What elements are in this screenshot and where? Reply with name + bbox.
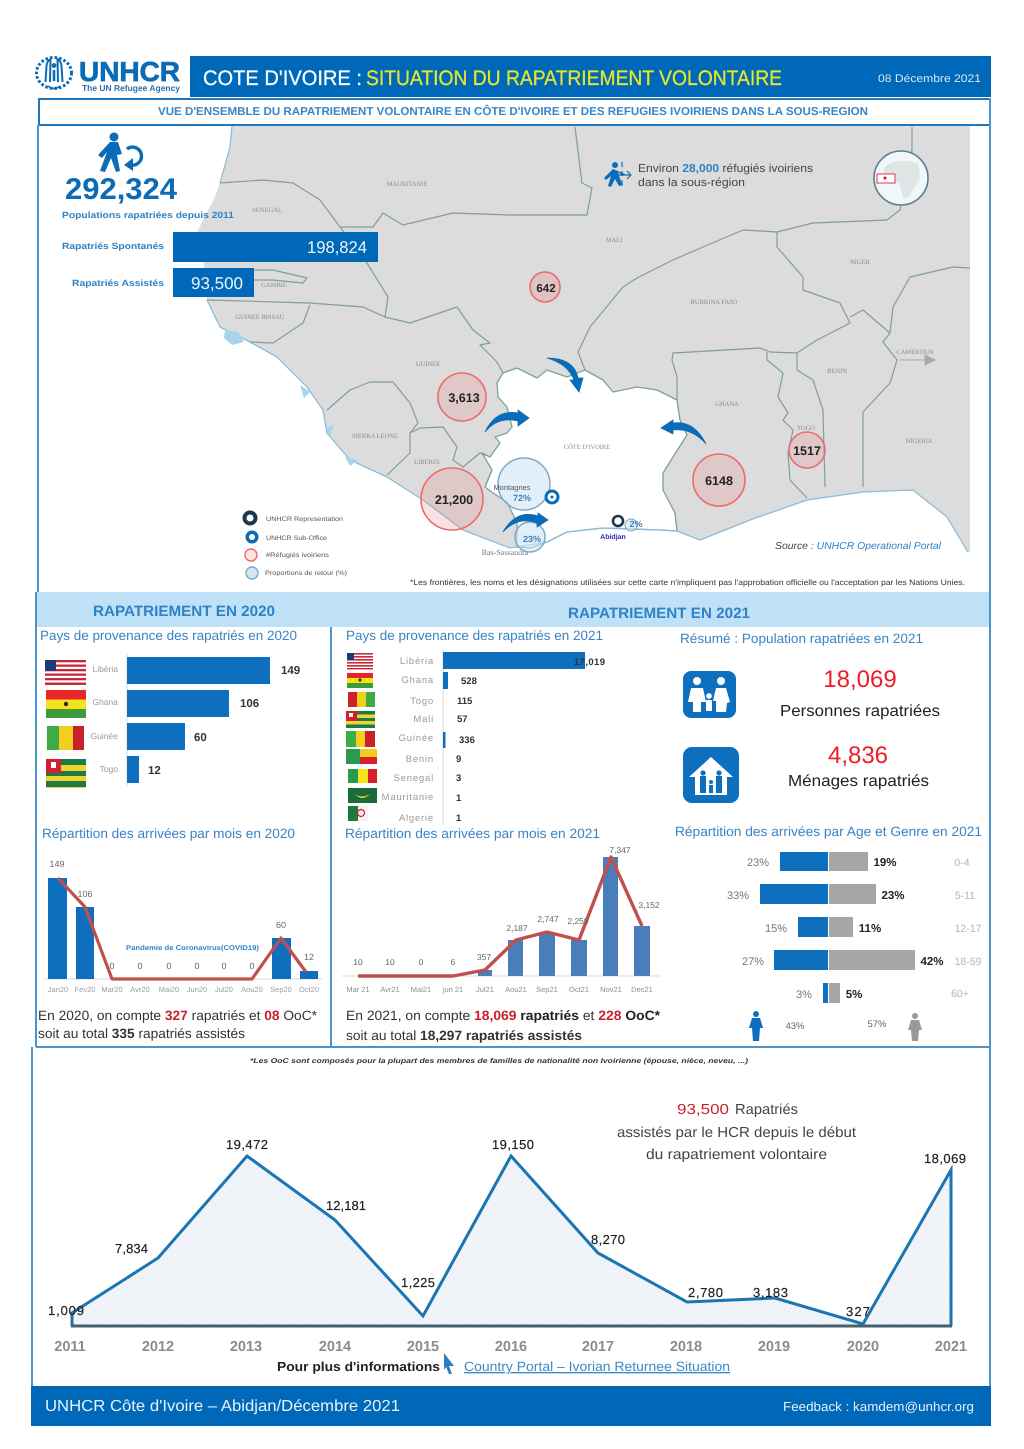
values: 8,270 [591, 1232, 625, 1247]
refugee note text: Environ 28,000 réfugiés ivoiriens [638, 163, 813, 175]
flags [346, 653, 377, 821]
chart callout: du rapatriement volontaire [646, 1147, 827, 1163]
footer bar [31, 1386, 991, 1426]
arrow: Liberia to CIV [503, 513, 548, 532]
values: 1,009 [48, 1303, 84, 1318]
return circle: Montagnes 72% [493, 458, 550, 510]
values: 7,834 [115, 1241, 148, 1256]
value labels: 0 [109, 961, 115, 971]
total returnees: 292,324 [65, 173, 177, 206]
country labels: TOGO [797, 425, 815, 432]
year labels: 2016 [495, 1339, 527, 1355]
country labels: Ghana [92, 697, 118, 707]
values: 19,472 [226, 1137, 268, 1152]
country labels [236, 181, 934, 557]
link: Country Portal – Ivorian Returnee Situation [464, 1359, 730, 1374]
value labels: 0 [249, 961, 255, 971]
country labels: Mauritanie [382, 792, 434, 803]
values: 1,225 [401, 1275, 435, 1290]
values: 57 [457, 714, 468, 725]
month labels: Aou21 [505, 985, 527, 994]
yellow title: SITUATION DU RAPATRIEMENT VOLONTAIRE [366, 67, 782, 90]
heading: Répartition des arrivées par mois en 2020 [42, 826, 295, 841]
return circle: Bas-Sassandra 23%: 23% [523, 534, 541, 544]
icon: returning person [98, 132, 141, 172]
country labels: LIBERIA [414, 459, 440, 466]
map source: Source : UNHCR Operational Portal [775, 541, 942, 552]
month labels [48, 985, 319, 994]
icon: male [749, 1011, 763, 1041]
heading: Répartition des arrivées par Age et Genre en 2021 [675, 824, 982, 839]
female percents: 19% [873, 857, 897, 869]
summary text: En 2020, on compte 327 rapatriés et 08 OoC* [38, 1008, 318, 1023]
month labels: Oct21 [569, 985, 589, 994]
axis [44, 978, 322, 980]
summary text: soit au total 335 rapatriés assistés [38, 1026, 245, 1041]
summary text [38, 1008, 318, 1041]
refugee note text [638, 163, 813, 189]
bars [48, 878, 318, 979]
values: 9 [456, 754, 461, 765]
main title: COTE D'IVOIRE : [203, 67, 362, 90]
chart callout: assistés par le HCR depuis le début [617, 1125, 856, 1141]
country labels: Togo [410, 696, 434, 707]
total caption: Populations rapatriées depuis 2011 [62, 210, 234, 220]
value labels: 0 [419, 957, 424, 967]
return circle: Abidjan 2% [625, 519, 643, 531]
map legend: #Réfugiés ivoiriens [266, 552, 330, 559]
month labels: Nov21 [600, 985, 622, 994]
month labels: Sep20 [270, 985, 292, 994]
icon: family [683, 671, 736, 718]
icon: cursor [444, 1353, 454, 1374]
value labels: 2,747 [537, 914, 559, 924]
heading: Pays de provenance des rapatriés en 2021 [346, 628, 603, 643]
month labels: Avr21 [380, 985, 400, 994]
age labels: 60+ [951, 988, 969, 1000]
month labels: jun 21 [442, 985, 463, 994]
year labels: 2014 [319, 1339, 351, 1355]
values [148, 665, 300, 777]
refugee circle: Ghana 6148: 6148 [705, 474, 733, 488]
heading: Pays de provenance des rapatriés en 2020 [40, 628, 297, 643]
bars [443, 652, 585, 748]
values: 528 [461, 676, 477, 687]
age labels: 5-11 [955, 890, 975, 902]
age labels: 18-59 [955, 956, 982, 968]
icon: female [908, 1013, 922, 1041]
logo wordmark: UNHCR [79, 56, 180, 87]
female bars [829, 852, 915, 1003]
male percents: 15% [765, 923, 787, 935]
refugee circle: Liberia 21,200 [421, 468, 483, 530]
arrow: Guinée to CIV [485, 410, 529, 432]
month labels: Sep21 [536, 985, 558, 994]
month labels: Mai20 [159, 985, 179, 994]
flag: Ghana [46, 690, 86, 718]
flag: Togo [46, 759, 86, 788]
more information line [277, 1353, 730, 1374]
month labels: Avr20 [130, 985, 150, 994]
axis [126, 653, 128, 787]
values [456, 657, 605, 824]
value labels: 0 [221, 961, 227, 971]
coastline [207, 126, 968, 552]
female percents [846, 857, 944, 1001]
axis [342, 975, 660, 977]
values: 3 [456, 773, 461, 784]
country labels: BURKINA FASO [690, 299, 738, 306]
female percents: 5% [846, 989, 862, 1001]
country borders [207, 127, 970, 498]
key figures panel [62, 132, 378, 297]
spontaneous label: Rapatriés Spontanés [62, 241, 164, 251]
persons value: 18,069 [823, 666, 897, 693]
values: 17,019 [574, 657, 605, 668]
age labels: 0-4 [954, 857, 970, 869]
bars [127, 657, 270, 783]
country labels: Guinée [91, 731, 118, 741]
value labels: 0 [166, 961, 172, 971]
spontaneous bar: 198,824 [307, 238, 367, 257]
country labels: SIERRA LEONE [352, 433, 398, 440]
inset globe [874, 151, 928, 205]
country labels: GUINEE BISSAU [236, 314, 285, 321]
month labels: Jul21 [476, 985, 494, 994]
male percents: 23% [747, 857, 769, 869]
subtitle band: VUE D'ENSEMBLE DU RAPATRIEMENT VOLONTAIRE EN CÔTE D'IVOIRE ET DES REFUGIES IVOIRIENS DANS LA SOUS-REGION [158, 104, 868, 118]
year labels: 2012 [142, 1339, 174, 1355]
return circle: Montagnes 72%: Montagnes [493, 483, 531, 492]
year labels: 2021 [935, 1339, 967, 1355]
date: 08 Décembre 2021 [878, 73, 981, 85]
year labels: 2013 [230, 1339, 262, 1355]
map legend [243, 511, 347, 579]
female share: 57% [867, 1019, 887, 1030]
arrow: Cameroun [900, 355, 935, 365]
value labels: 149 [49, 859, 65, 869]
values: 18,069 [924, 1151, 966, 1166]
year labels [54, 1339, 967, 1355]
country labels: MALI [606, 237, 622, 244]
flag: Guinée [47, 726, 84, 750]
values: 3,183 [753, 1285, 788, 1300]
values: 19,150 [492, 1137, 534, 1152]
month labels: Jul20 [215, 985, 233, 994]
UNHCR logo [36, 56, 180, 93]
refugee circle: Liberia 21,200: 21,200 [435, 493, 473, 507]
arrow: Ghana to CIV [661, 420, 706, 444]
map legend: UNHCR Sub-Office [266, 535, 327, 542]
map legend: Proportions de retour (%) [265, 570, 347, 577]
heading 2021: RAPATRIEMENT EN 2021 [568, 605, 750, 622]
country labels [382, 656, 434, 824]
year labels: 2017 [582, 1339, 614, 1355]
month labels: Mai21 [411, 985, 431, 994]
values: 327 [846, 1304, 870, 1319]
month labels: Mar20 [101, 985, 123, 994]
Côte d'Ivoire territory [482, 368, 687, 548]
assisted label: Rapatriés Assistés [72, 278, 164, 288]
section band [36, 592, 990, 627]
summary text: En 2021, on compte 18,069 rapatriés et 228 OoC* [346, 1008, 661, 1023]
summary text: soit au total 18,297 rapatriés assistés [346, 1028, 582, 1043]
refugee circle: Guinée 3,613: 3,613 [448, 391, 480, 405]
subtitle band [39, 99, 990, 125]
values: 12 [148, 765, 161, 777]
refugee circle: Togo 1517: 1517 [793, 444, 821, 458]
refugee note text: dans la sous-région [638, 177, 745, 189]
country labels: BENIN [827, 368, 847, 375]
header banner [190, 56, 991, 97]
month labels: Mar 21 [346, 985, 370, 994]
panel: summary 2021 [680, 631, 940, 803]
year labels: 2018 [670, 1339, 702, 1355]
year labels: 2011 [54, 1339, 86, 1355]
value labels [49, 859, 314, 971]
country labels: NIGERIA [906, 438, 933, 445]
more information line: Pour plus d'informations [277, 1359, 440, 1374]
axis [442, 649, 444, 825]
values: 60 [194, 732, 207, 744]
households label: Ménages rapatriés [788, 773, 929, 790]
value labels: 2,187 [506, 923, 528, 933]
panel: annual area chart [48, 1102, 967, 1355]
households value: 4,836 [828, 742, 888, 769]
country labels: CAMEROUN [896, 349, 934, 356]
country labels [91, 664, 118, 774]
value labels: 60 [276, 920, 286, 930]
country labels: GHANA [715, 401, 739, 408]
heading: Répartition des arrivées par mois en 2021 [345, 826, 600, 841]
values: 106 [240, 698, 259, 710]
assisted bar: 93,500 [191, 274, 243, 293]
female percents: 23% [881, 890, 905, 902]
value labels: 10 [353, 957, 363, 967]
refugee circle: Ghana 6148 [693, 454, 745, 506]
country labels: Guinée [399, 733, 434, 744]
arrow: Mali to CIV [547, 358, 583, 392]
country labels: GUINEE [416, 361, 440, 368]
country labels: CÔTE D'IVOIRE [564, 443, 610, 451]
values: 115 [457, 696, 473, 707]
country labels: Libéria [400, 656, 434, 667]
value labels: 12 [304, 952, 314, 962]
refugee circle: Mali 642: 642 [536, 283, 556, 295]
panel: monthly chart 2021 [342, 826, 661, 1043]
area fill [72, 1156, 951, 1326]
values [48, 1137, 966, 1319]
country labels: MAURITANIE [387, 181, 427, 188]
age labels [951, 857, 982, 1000]
value labels: 7,347 [609, 845, 631, 855]
female percents: 42% [920, 956, 944, 968]
country labels: Libéria [92, 664, 118, 674]
male percents: 33% [727, 890, 749, 902]
panel: monthly chart 2020 [38, 826, 322, 1041]
heading 2020: RAPATRIEMENT EN 2020 [93, 603, 275, 620]
icon: representation Abidjan [600, 516, 626, 541]
value labels: 6 [451, 957, 456, 967]
footer bar: UNHCR Côte d'Ivoire – Abidjan/Décembre 2021 [45, 1398, 400, 1415]
icon: representation Abidjan: Abidjan [600, 533, 626, 541]
male percents: 3% [796, 989, 812, 1001]
refugee circle: Togo 1517 [789, 432, 825, 468]
value labels: 357 [477, 952, 491, 962]
country labels: Algerie [399, 813, 434, 824]
map legend: UNHCR Representation [266, 516, 343, 523]
month labels: Aou20 [241, 985, 263, 994]
spontaneous bar [173, 232, 378, 262]
value labels: 0 [194, 961, 200, 971]
values: 336 [459, 735, 475, 746]
value labels: 106 [77, 889, 93, 899]
month labels: Oct20 [299, 985, 319, 994]
country labels: SENEGAL [252, 207, 282, 214]
month labels [346, 985, 653, 994]
chart callout [617, 1102, 856, 1163]
icon: household [683, 747, 739, 803]
icon: laurel emblem [36, 58, 72, 88]
country labels: Togo [100, 764, 118, 774]
refugee note icon [604, 162, 631, 187]
male share: 43% [785, 1021, 805, 1032]
panel: origin 2021 [346, 628, 605, 825]
year labels: 2015 [407, 1339, 439, 1355]
panel: age and gender pyramid [675, 824, 982, 1041]
panel: origin 2020 [40, 628, 300, 788]
male bars [760, 852, 828, 1003]
return circle: Abidjan 2%: 2% [629, 519, 643, 529]
age labels: 12-17 [955, 923, 982, 935]
refugee circle: Guinée 3,613 [438, 373, 486, 421]
chart callout: 93,500 [677, 1102, 729, 1118]
country labels: GAMBIE [261, 282, 287, 289]
land mass [197, 126, 970, 552]
value labels: 10 [385, 957, 395, 967]
baseline [71, 1324, 952, 1328]
year labels: 2019 [758, 1339, 790, 1355]
country labels: Mali [413, 714, 434, 725]
logo tagline: The UN Refugee Agency [82, 83, 180, 93]
trend line [58, 878, 306, 979]
heading: Résumé : Population rapatriées en 2021 [680, 631, 923, 646]
country labels: Senegal [394, 773, 434, 784]
refugee circle: Mali 642 [530, 272, 560, 302]
flag: Liberia [45, 660, 86, 685]
map disclaimer: *Les frontières, les noms et les désignations utilisées sur cette carte n'impliquent pas l'approbation officielle ou l'acceptation par les Nations Unies. [410, 578, 965, 587]
male percents [727, 857, 812, 1001]
values: 12,181 [326, 1198, 366, 1213]
map panel [197, 126, 970, 587]
month labels: Jun20 [187, 985, 207, 994]
icon: sub-office [546, 491, 558, 503]
month labels: Jan20 [48, 985, 68, 994]
persons label: Personnes rapatriées [780, 703, 940, 720]
return circle: Montagnes 72%: 72% [513, 493, 531, 503]
country labels: Bas-Sassandra [482, 548, 529, 557]
month labels: Dec21 [631, 985, 653, 994]
chart callout: Rapatriés [735, 1102, 798, 1118]
country labels: Benin [406, 754, 434, 765]
values: 1 [456, 793, 462, 804]
month labels: Fev20 [75, 985, 95, 994]
value labels: 3,152 [638, 900, 660, 910]
female percents: 11% [859, 923, 881, 935]
value labels [353, 845, 660, 967]
summary text [346, 1008, 661, 1043]
male percents: 27% [742, 956, 764, 968]
value labels: 2,259 [567, 916, 589, 926]
value labels: 0 [137, 961, 143, 971]
annotation: Pandemie de Coronavirus(COVID19) [126, 944, 259, 952]
country labels: NIGER [850, 259, 871, 266]
trend line [72, 1156, 951, 1326]
assisted bar [173, 268, 254, 297]
return circle: Bas-Sassandra 23% [515, 522, 545, 552]
estuary islands [224, 330, 358, 466]
bars [478, 857, 650, 976]
footer bar: Feedback : kamdem@unhcr.org [783, 1399, 974, 1414]
footnote: *Les OoC sont composés pour la plupart des membres de familles de nationalité non Ivoirienne (épouse, nièce, neveu, ...) [250, 1057, 749, 1065]
trend line [358, 857, 642, 976]
values: 149 [281, 665, 300, 677]
country labels: Ghana [401, 675, 434, 686]
values: 1 [456, 813, 462, 824]
values: 2,780 [688, 1285, 723, 1300]
year labels: 2020 [847, 1339, 879, 1355]
